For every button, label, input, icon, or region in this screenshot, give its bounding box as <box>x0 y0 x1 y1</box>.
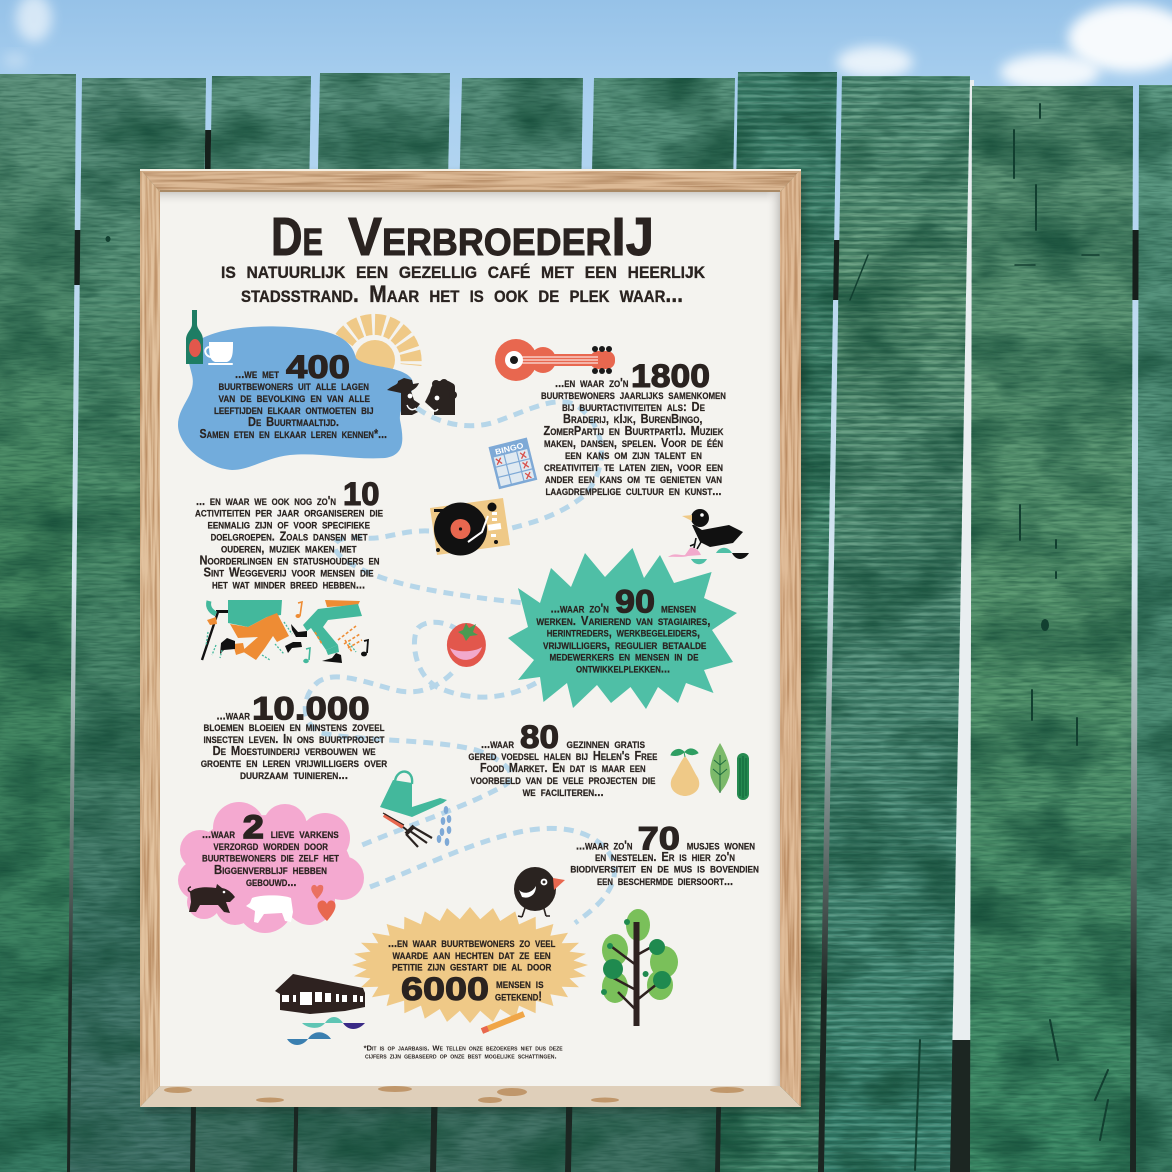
text: 1800 block: ander een kans om te genieten van <box>545 472 722 486</box>
icon: watering can <box>380 772 447 817</box>
icon: beach house <box>275 974 365 1014</box>
text: 10 block: activiteiten per jaar organiseren die <box>195 506 383 520</box>
text: 2 block: verzorgd worden door <box>213 839 328 853</box>
subtitle: stadsstrand. Maar het is ook de plek waar... <box>241 281 683 308</box>
footnote <box>364 1044 563 1061</box>
text: 10.000 block: insecten leven. In ons buurtproject <box>204 732 385 746</box>
text: 400 block: 400 <box>286 349 350 385</box>
text: 10.000 block: duurzaam tuinieren... <box>240 768 348 782</box>
wooden picture frame <box>140 169 801 1107</box>
frame wear marks <box>164 1086 744 1103</box>
text: 400 block: ...we met <box>235 367 279 381</box>
text: 10.000 block: ...waar <box>216 708 250 722</box>
footnote: *Dit is op jaarbasis. We tellen onze bezoekers niet dus deze <box>364 1044 563 1053</box>
text: 90 block: herintreders, werkbegeleiders, <box>547 626 700 640</box>
text: 70 block: en nestelen. Er is hier zo'n <box>595 850 735 864</box>
title: De <box>271 207 323 267</box>
panel: yellow burst <box>352 907 588 1023</box>
icon: garden fork <box>383 813 432 847</box>
text: 1800 block: buurtbewoners jaarlijks samenkomen <box>541 388 726 402</box>
icon: bingo card <box>490 439 536 488</box>
text: 10.000 block: 10.000 <box>252 690 370 726</box>
text: 400 block: De Buurtmaaltijd. <box>248 415 339 429</box>
icon: music notes <box>296 602 368 663</box>
text: 90 block: vrijwilligers, regulier betaalde <box>543 638 706 652</box>
dark gaps between planks <box>72 130 1140 300</box>
text: 6000 block: waarde aan hechten dat ze een <box>392 948 551 962</box>
text: 400 block: buurtbewoners uit alle lagen <box>218 379 369 393</box>
poster paper <box>160 192 780 1086</box>
title: VerbroederIJ <box>348 207 654 267</box>
subtitle: is natuurlijk een gezellig café met een heerlijk <box>221 257 706 284</box>
text: 2 block: Biggenverblijf hebben <box>214 863 327 877</box>
cracks and knots in the wood <box>106 104 1108 1170</box>
icon: tomato <box>447 623 486 667</box>
icon: pear, leaf and cucumber <box>671 743 749 800</box>
text: 90 block: ontwikkelplekken... <box>576 662 670 676</box>
text: 80 block: we faciliteren... <box>523 785 604 799</box>
text: 90 block: mensen <box>661 602 696 616</box>
icon: tree <box>601 909 678 1026</box>
frame shadow <box>144 174 806 1114</box>
text: 10 block: ouderen, muziek maken met <box>221 542 357 556</box>
text: 80 block: gezinnen gratis <box>566 737 645 751</box>
clouds <box>3 0 1172 90</box>
icon: dark pig <box>188 884 235 913</box>
text: 10 block: Sint Weggeverij voor mensen die <box>204 566 374 580</box>
text: 10.000 block: bloemen bloeien en minstens zoveel <box>204 720 385 734</box>
text: 1800 block: 1800 <box>631 358 710 394</box>
text: 400 block: Samen eten en elkaar leren kennen*... <box>200 427 387 441</box>
icon: waves <box>287 1017 365 1045</box>
text: 70 block: musjes wonen <box>687 838 755 852</box>
text: 70 block: biodiversiteit en de mus is bovendien <box>570 862 759 876</box>
text: 80 block: voorbeeld van de vele projecten die <box>470 773 655 787</box>
dashed route <box>305 402 614 923</box>
text: 1800 block: ...en waar zo'n <box>555 376 628 390</box>
text: 10 block: ... en waar we ook nog zo'n <box>196 494 336 508</box>
text: 1800 block: ZomerPartij en BuurtpartIj. Muziek <box>544 424 724 438</box>
icon: pencil <box>482 1014 524 1031</box>
text: 10 block <box>195 476 383 592</box>
panel: teal star <box>508 548 737 709</box>
text: 10 block: eenmalig zijn of voor specifieke <box>208 518 370 532</box>
text: 2 block: gebouwd... <box>246 875 296 889</box>
text: 70 block: een beschermde diersoort... <box>597 874 733 888</box>
text: 10.000 block <box>201 690 388 782</box>
text: 6000 block: 6000 <box>401 971 489 1007</box>
text: 80 block: 80 <box>520 719 559 755</box>
text: 1800 block: maken, dansen, spelen. Voor de één <box>544 436 723 450</box>
text: 80 block: gered voedsel halen bij Helen's Free <box>468 749 657 763</box>
text: 90 block: medewerkers en mensen in de <box>550 650 698 664</box>
icon: two talking heads <box>387 378 457 415</box>
text: 400 block <box>200 349 387 441</box>
text: 70 block <box>570 820 759 888</box>
subtitle <box>221 257 706 308</box>
text: 2 block <box>202 809 339 889</box>
text: 10 block: Noorderlingen en statushouders en <box>200 554 380 568</box>
panel: pink cloud <box>178 802 364 933</box>
text: 6000 block <box>388 936 556 1007</box>
icon: bingo card: BINGO <box>494 441 524 457</box>
text: 1800 block: Braderij, kIjk, BurenBingo, <box>563 412 702 426</box>
icon: dancing legs <box>202 600 368 663</box>
text: 10 block: 10 <box>343 476 380 512</box>
text: 10.000 block: De Moestuinderij verbouwen we <box>213 744 376 758</box>
text: 1800 block: een kans om zijn talent en <box>565 448 702 462</box>
text: 6000 block: mensen is <box>496 977 544 991</box>
icon: coffee cup <box>205 342 233 365</box>
icon: blackbird <box>514 867 565 917</box>
text: 90 block: ...waar zo'n <box>551 602 609 616</box>
icon: white pig <box>246 895 293 923</box>
text: 90 block <box>536 584 710 676</box>
text: 90 block: 90 <box>615 584 655 620</box>
text: 90 block: werken. Varierend van stagiaires, <box>536 614 710 628</box>
text: 10 block: doelgroepen. Zoals dansen met <box>211 530 368 544</box>
icon: hearts <box>311 885 336 921</box>
icon: record player <box>430 498 510 556</box>
text: 80 block: Food Market. En dat is maar een <box>480 761 646 775</box>
text: 1800 block: creativiteit te laten zien, voor een <box>544 460 723 474</box>
text: 6000 block: petitie zijn gestart die al door <box>392 960 552 974</box>
icon: guitar <box>495 339 615 381</box>
icon: water bird <box>668 509 749 564</box>
footnote: cijfers zijn gebaseerd op onze best mogelijke schattingen. <box>365 1052 557 1061</box>
text: 2 block: 2 <box>243 809 264 845</box>
text: 80 block <box>468 719 657 799</box>
text: 10.000 block: groente en leren vrijwilligers over <box>201 756 388 770</box>
text: 70 block: 70 <box>638 820 680 856</box>
panel: blue blob <box>178 326 413 470</box>
text: 80 block: ...waar <box>481 737 514 751</box>
text: 2 block: buurtbewoners die zelf het <box>202 851 339 865</box>
icon: sun <box>344 324 411 380</box>
text: 400 block: van de bevolking en van alle <box>218 391 370 405</box>
light gap between planks <box>948 80 974 1040</box>
text: 6000 block: getekend! <box>495 990 542 1004</box>
text: 6000 block: ...en waar buurtbewoners zo veel <box>388 936 556 950</box>
text: 400 block: leeftijden elkaar ontmoeten bij <box>214 403 374 417</box>
text: 1800 block: laagdrempelige cultuur en kunst... <box>546 484 722 498</box>
icon: bottle <box>186 310 203 364</box>
text: 10 block: het wat minder breed hebben... <box>212 578 365 592</box>
text: 2 block: lieve varkens <box>271 827 339 841</box>
icon: water drops <box>437 806 451 846</box>
text: 2 block: ...waar <box>202 827 235 841</box>
text: 1800 block <box>541 358 726 498</box>
text: 70 block: ...waar zo'n <box>576 838 632 852</box>
text: 1800 block: bij buurtactiviteiten als: De <box>562 400 705 414</box>
